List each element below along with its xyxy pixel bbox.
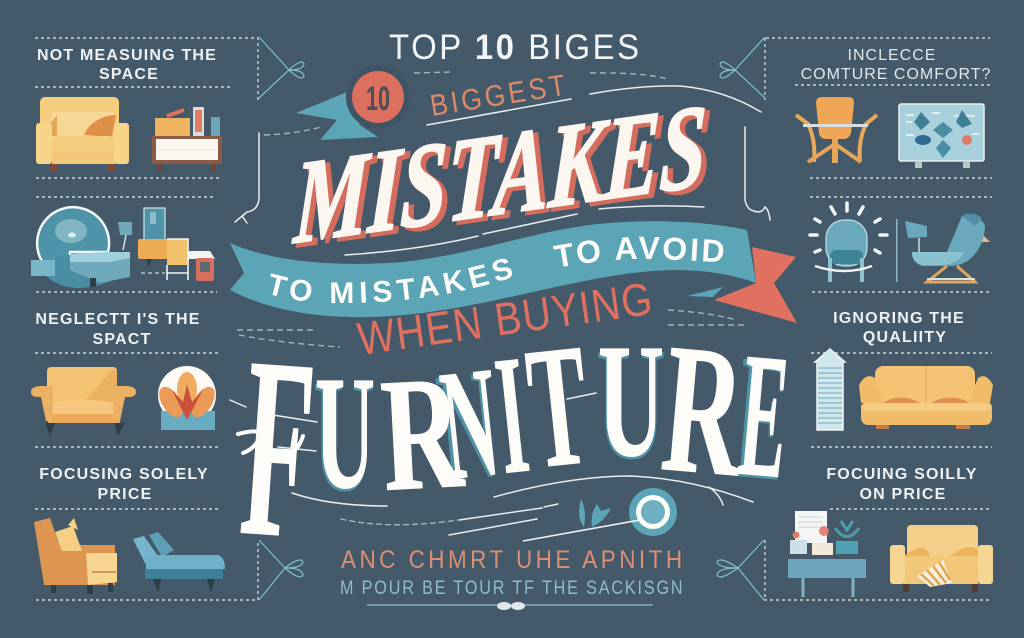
- icon: tall window shutter: [815, 349, 845, 430]
- word: furniture shadow and letters: U: [596, 315, 666, 494]
- word: furniture shadow and letters: N: [434, 334, 506, 514]
- word: furniture shadow and letters: U: [313, 347, 375, 526]
- word: furniture shadow and letters: U: [315, 344, 375, 523]
- word: mistakes: MISTAKES: [296, 81, 714, 272]
- main wavy ribbon: TO AVOID: [553, 236, 724, 267]
- small ribbon with number badge: 10: [366, 80, 390, 118]
- label: ignoring the quality: IGNORING THE: [833, 310, 965, 327]
- label: focusing solely price: PRICE: [98, 486, 152, 503]
- label: comfort: COMTURE COMFORT?: [801, 66, 991, 83]
- icon: armchair yellow: [36, 97, 129, 172]
- decorative corner ornaments: [259, 37, 765, 600]
- label: neglect the space: SPACT: [92, 331, 152, 348]
- word: mistakes: [291, 78, 714, 272]
- text: E: [733, 315, 796, 516]
- label: ignoring the quality: QUALIITY: [863, 329, 947, 346]
- label: focusing solely on price right: ON PRICE: [860, 486, 946, 503]
- bottom ornament rule: [367, 602, 653, 610]
- icon: orange chair with table: [796, 97, 877, 163]
- main wavy ribbon: [230, 221, 797, 323]
- small ribbon with number badge: [296, 65, 410, 140]
- label: not measuring the space: NOT MEASUING THE: [37, 47, 217, 64]
- icon: desk and chair set: [138, 208, 215, 281]
- word: furniture shadow and letters: [234, 303, 796, 593]
- label: focusing solely price: FOCUSING SOLELY: [39, 466, 209, 483]
- label: comfort: INCLECCE: [848, 47, 936, 64]
- icon: dresser with box: [152, 107, 222, 172]
- main wavy ribbon: TO MISTAKES: [270, 258, 512, 304]
- icon: blue lounge chair and lamp: [896, 213, 990, 282]
- icon: chart board: [899, 104, 984, 168]
- icon: armchair with striped throw: [890, 525, 993, 592]
- icon: orange wingback chair: [34, 518, 117, 594]
- caption line coral: ANC CHMRT UHE APNITH: [341, 546, 682, 574]
- label: focusing solely on price right: FOCUING SOILLY: [826, 466, 978, 483]
- label: not measuring the space: SPACE: [99, 66, 159, 83]
- label: neglect the space: NEGLECTT I'S THE: [35, 311, 201, 328]
- icon: leaf plant globe: [154, 366, 220, 430]
- icon: yellow sofa: [859, 366, 993, 429]
- subtitle: when buying: WHEN BUYING: [354, 273, 655, 366]
- word: furniture shadow and letters: R: [377, 343, 468, 526]
- decorative lines top: [235, 86, 770, 255]
- word: mistakes: MISTAKES: [291, 78, 709, 269]
- icon: target circle with leaves: [523, 488, 677, 541]
- word: furniture shadow and letters: T: [519, 307, 597, 505]
- icon: blue side table with papers: [788, 511, 866, 597]
- icon: blue chair with rays: [810, 203, 887, 282]
- icon: blue chaise lounge: [133, 532, 225, 592]
- text: E: [729, 316, 796, 519]
- subtitle: biggest: BIGGEST: [428, 67, 568, 122]
- word: furniture shadow and letters: U: [598, 312, 664, 491]
- word: furniture shadow and letters: F: [234, 303, 322, 593]
- caption line blue: M POUR BE TOUR TF THE SACKISGN: [340, 577, 683, 598]
- word: furniture shadow and letters: I: [488, 320, 536, 510]
- word: furniture shadow and letters: R: [656, 305, 753, 516]
- icon: sofa chair with rolled arms: [31, 367, 136, 436]
- title: top 10 biges: TOP 10 BIGES: [389, 28, 639, 67]
- decorative lines bottom: [230, 393, 753, 535]
- word: furniture shadow and letters: N: [430, 336, 504, 516]
- icon: round teal chair set: [31, 207, 132, 288]
